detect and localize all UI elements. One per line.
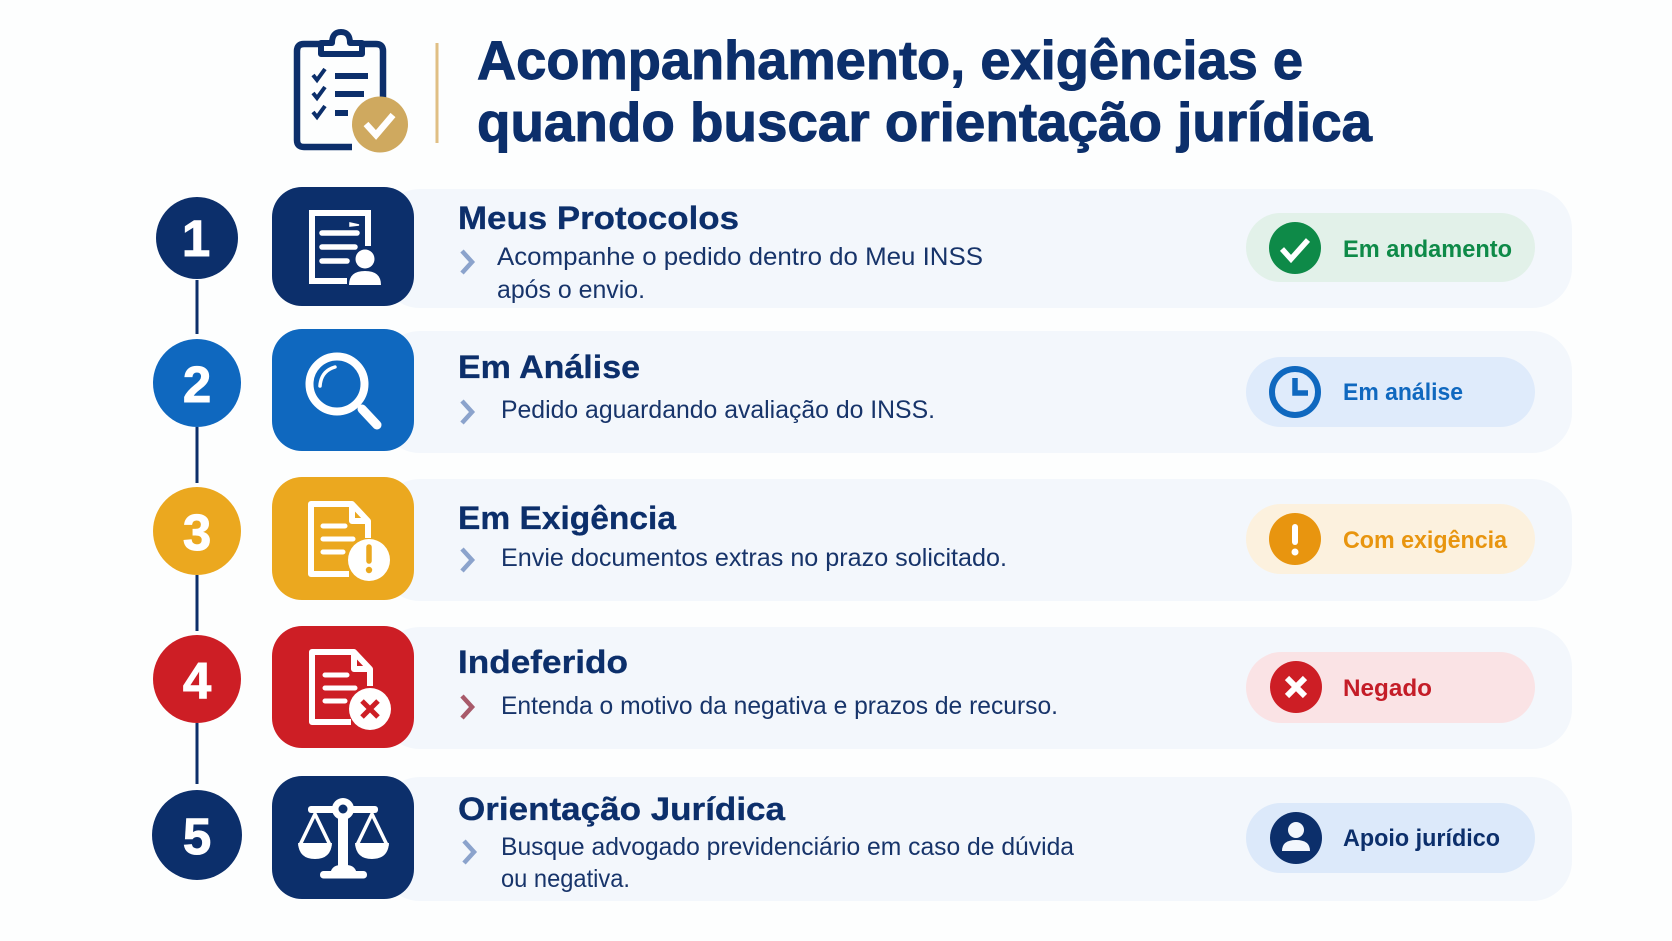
status pill: Em análise (1246, 357, 1535, 427)
row 2: Em Análise (153, 329, 1572, 453)
number badge 2: 2 (183, 356, 211, 413)
timeline connector lines (196, 280, 198, 784)
heading: Em Análise (458, 349, 640, 385)
icon: scales of justice (272, 776, 414, 899)
panel background (380, 189, 1572, 308)
header (297, 29, 1372, 153)
icon: document with cross (272, 626, 414, 748)
number badge 3 (153, 487, 241, 575)
description (501, 833, 1074, 893)
status pill: Apoio jurídico (1246, 803, 1535, 873)
description: Pedido aguardando avaliação do INSS. (501, 396, 935, 424)
status pill: Negado (1246, 652, 1535, 723)
panel background (380, 777, 1572, 901)
heading: Indeferido (458, 644, 628, 680)
title: quando buscar orientação jurídica (477, 91, 1372, 153)
status pill: Em análise: Em análise (1343, 379, 1463, 406)
row 1: Meus Protocolos (156, 187, 1572, 308)
row 4: Indeferido (153, 626, 1572, 749)
status pill: Em andamento (1246, 213, 1535, 282)
chevron (462, 549, 472, 571)
chevron (462, 251, 472, 273)
number badge 2 (153, 339, 241, 427)
chevron (462, 401, 472, 423)
icon: magnifier (272, 329, 414, 451)
title (477, 29, 1372, 153)
number badge 5: 5 (183, 808, 211, 865)
icon: document with person (272, 187, 414, 306)
chevron (464, 841, 474, 863)
number badge 1 (156, 197, 238, 279)
number badge 1: 1 (182, 210, 210, 267)
panel background (380, 479, 1572, 601)
panel background (380, 627, 1572, 749)
status pill: Com exigência (1246, 504, 1535, 574)
description: ou negativa. (501, 865, 630, 893)
description: Entenda o motivo da negativa e prazos de recurso. (501, 692, 1058, 720)
number badge 4 (153, 635, 241, 723)
heading: Orientação Jurídica (458, 791, 785, 827)
icon: document with warning (272, 477, 414, 600)
status pill: Apoio jurídico: Apoio jurídico (1343, 825, 1500, 852)
description (497, 243, 983, 304)
number badge 3: 3 (183, 504, 211, 561)
number badge 5 (152, 790, 242, 880)
description: após o envio. (497, 276, 645, 304)
status pill: Em andamento: Em andamento (1343, 236, 1512, 263)
status pill: Com exigência: Com exigência (1343, 527, 1508, 554)
icon: clipboard with check (297, 32, 408, 152)
status pill: Negado: Negado (1343, 675, 1432, 702)
heading: Em Exigência (458, 500, 676, 536)
row 5: Orientação Jurídica (152, 776, 1572, 901)
row 3: Em Exigência (153, 477, 1572, 601)
panel background (380, 331, 1572, 453)
number badge 4: 4 (183, 652, 212, 709)
chevron (462, 696, 472, 718)
description: Busque advogado previdenciário em caso de dúvida (501, 833, 1074, 861)
title: Acompanhamento, exigências e (477, 29, 1303, 91)
description: Acompanhe o pedido dentro do Meu INSS (497, 243, 983, 271)
heading: Meus Protocolos (458, 200, 739, 236)
description: Envie documentos extras no prazo solicitado. (501, 544, 1007, 572)
